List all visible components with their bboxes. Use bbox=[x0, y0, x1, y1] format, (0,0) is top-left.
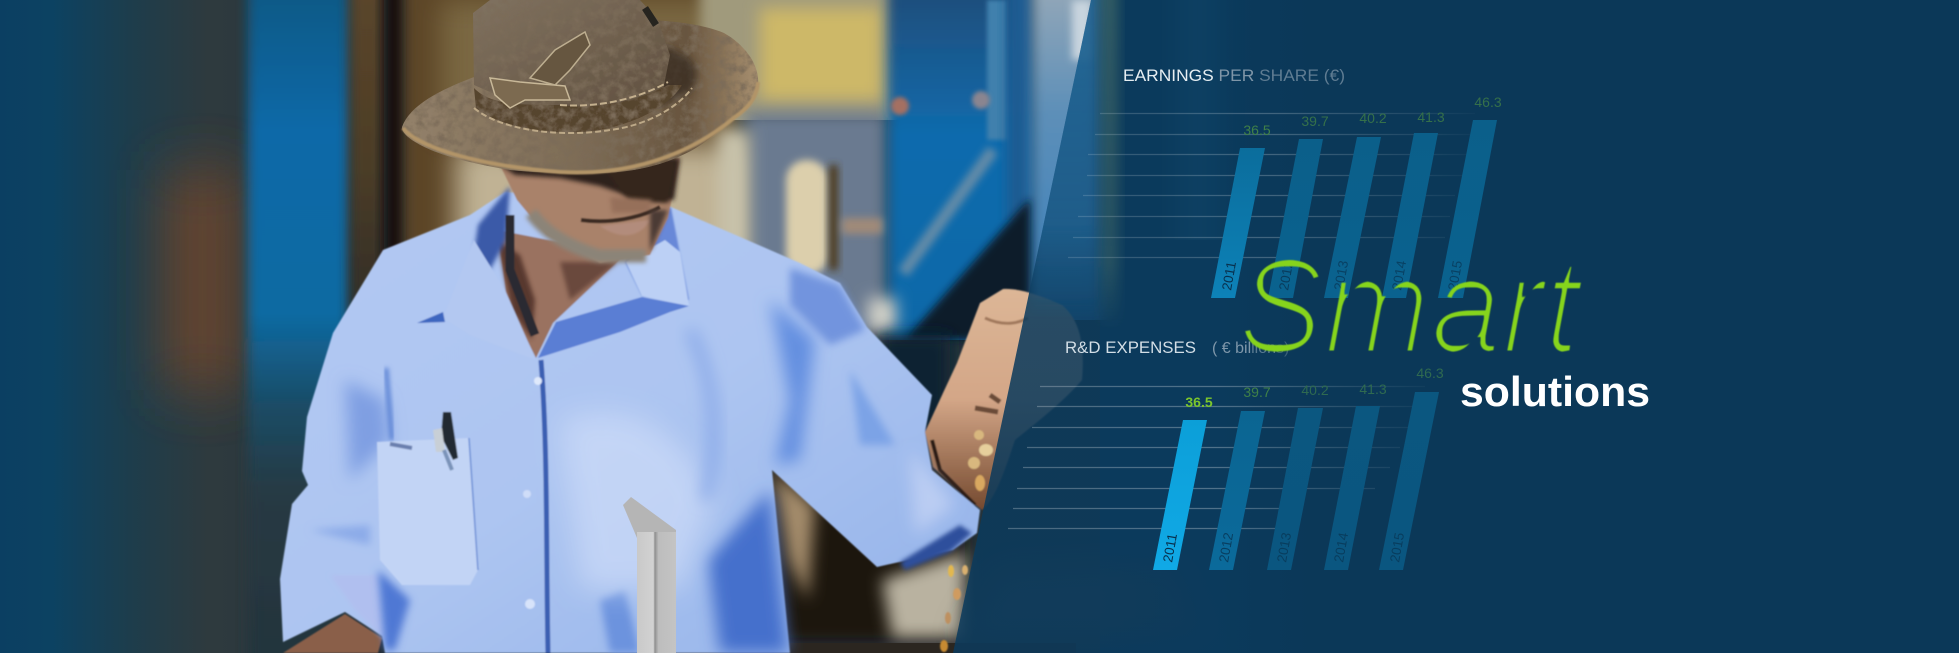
year labels: 2011 bbox=[1160, 532, 1180, 564]
subtitle: solutions: solutions bbox=[1460, 368, 1650, 415]
table edge bbox=[676, 643, 955, 653]
value labels: 39.7 bbox=[1301, 113, 1329, 129]
shirt collar bbox=[417, 186, 689, 360]
year labels: 2012 bbox=[1216, 531, 1236, 564]
shirt placket and buttons bbox=[523, 360, 548, 653]
value labels: 41.3 bbox=[1359, 381, 1387, 397]
hat brim bbox=[402, 20, 758, 173]
title: Smart: Smart bbox=[1238, 232, 1585, 381]
panel tint: ghosted machine stripes bbox=[1032, 0, 1123, 308]
farmer bbox=[280, 158, 1083, 653]
chart: earnings per share bbox=[1068, 66, 1502, 298]
year labels: 2012 bbox=[1276, 259, 1296, 292]
year labels: 2015 bbox=[1445, 259, 1465, 292]
hat band with frayed stitching bbox=[474, 85, 682, 132]
chart heading: R&D expenses: R&D EXPENSES bbox=[1065, 338, 1196, 357]
year labels: 2014 bbox=[1331, 531, 1351, 564]
shirt folds and shadows bbox=[310, 268, 972, 653]
value labels bbox=[1243, 94, 1502, 138]
lanyard bbox=[510, 215, 535, 335]
year labels: 2011 bbox=[1219, 260, 1239, 292]
bars bbox=[1153, 392, 1439, 570]
metal bracket bbox=[623, 497, 676, 653]
chart heading: earnings per share: EARNINGS PER SHARE (€) bbox=[1123, 66, 1345, 85]
left hand bbox=[283, 614, 382, 653]
value labels: 46.3 bbox=[1474, 94, 1502, 110]
blurred workshop background bbox=[0, 0, 1220, 653]
banner artwork bbox=[84, 0, 1648, 653]
value labels: 40.2 bbox=[1301, 382, 1329, 398]
grid lines bbox=[1008, 386, 1425, 528]
grid lines bbox=[1068, 114, 1475, 258]
shirt pocket bbox=[377, 438, 479, 585]
value labels: 36.5 bbox=[1243, 122, 1271, 138]
value labels: 39.7 bbox=[1243, 384, 1271, 400]
value labels: 41.3 bbox=[1417, 109, 1445, 125]
value labels: 36.5 bbox=[1185, 394, 1213, 410]
value labels: 46.3 bbox=[1416, 365, 1444, 381]
panel: diagonal navy overlay bbox=[953, 0, 1959, 653]
hat crown bbox=[473, 0, 670, 112]
chart: R&D expenses bbox=[1008, 338, 1444, 570]
hat bbox=[402, 0, 758, 173]
shirt body bbox=[280, 192, 980, 653]
raised hand and forearm bbox=[925, 289, 1083, 510]
bars bbox=[1211, 120, 1497, 298]
year labels: 2013 bbox=[1274, 531, 1294, 564]
value labels bbox=[1185, 365, 1444, 410]
year labels bbox=[1160, 531, 1407, 564]
grain falling from hand bbox=[940, 430, 993, 652]
year labels: 2013 bbox=[1331, 259, 1351, 292]
year labels: 2014 bbox=[1389, 259, 1409, 292]
pen in pocket bbox=[433, 412, 458, 470]
year labels bbox=[1219, 259, 1465, 292]
year labels: 2015 bbox=[1387, 531, 1407, 564]
value labels: 40.2 bbox=[1359, 110, 1387, 126]
face bbox=[500, 158, 680, 263]
photo: farmer handling grain bbox=[0, 0, 1220, 653]
chart unit: ( € billions) bbox=[1212, 340, 1289, 357]
neck and chest skin bbox=[497, 230, 625, 358]
